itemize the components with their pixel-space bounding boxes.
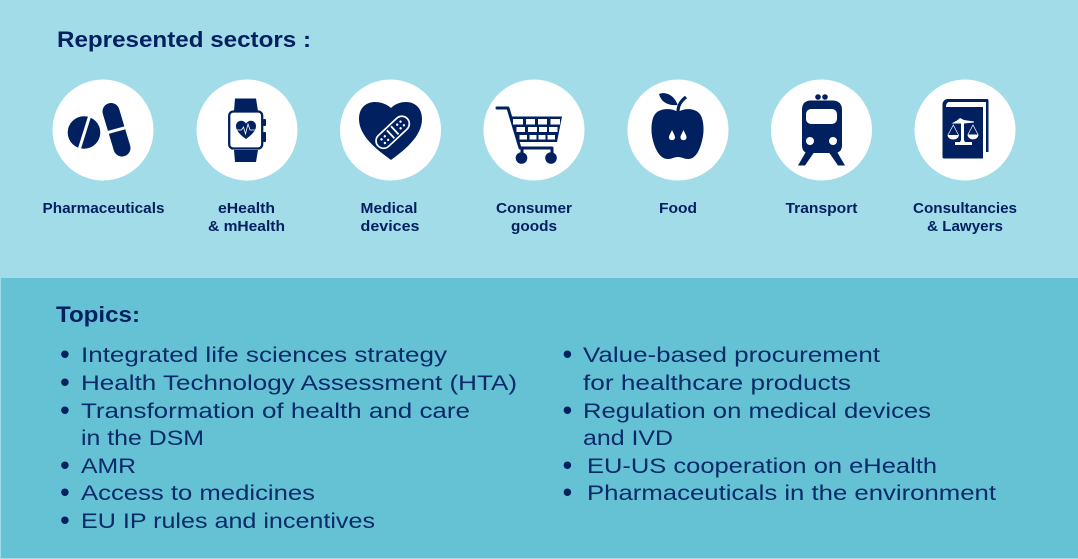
label: medical devices [360, 201, 420, 235]
sector: food [628, 80, 728, 217]
topics list: right column: • [562, 476, 572, 508]
label: consultancies and lawyers: & Lawyers [927, 219, 1003, 235]
icon: law book with scales [942, 99, 988, 158]
sector: consultancies and lawyers [913, 80, 1017, 235]
icon: heart with bandage [359, 102, 422, 160]
sector: pharmaceuticals [42, 80, 164, 217]
topics list: left column: • [60, 476, 70, 508]
panel: topics [1, 278, 1078, 558]
icon: train [798, 94, 845, 166]
label: eHealth and mHealth [208, 201, 285, 235]
topics list: left column: EU IP rules and incentives [81, 509, 375, 533]
topics list: left column: Transformation of health and care [81, 399, 470, 423]
sector: consumer goods [484, 80, 584, 235]
topics list: right column: • [562, 394, 572, 426]
sector: transport [771, 80, 872, 217]
topics list: left column: • [60, 504, 70, 536]
label: pharmaceuticals: Pharmaceuticals [42, 201, 164, 217]
heading: topics: Topics: [56, 302, 140, 327]
topics list: left column: in the DSM [81, 426, 204, 450]
label: food: Food [659, 201, 697, 217]
topics list: left column: • [60, 366, 70, 398]
topics list: right column: Pharmaceuticals in the environment [587, 481, 996, 505]
topics list: left column: Integrated life sciences strategy [81, 343, 447, 367]
topics list: right column: • [562, 338, 572, 370]
label: consumer goods: goods [511, 219, 557, 235]
topics list: right column: Regulation on medical devices [583, 399, 931, 423]
label: medical devices: devices [360, 219, 420, 235]
topics list: left column: Access to medicines [81, 481, 315, 505]
icon: pills [68, 112, 126, 150]
icon: apple [651, 93, 704, 159]
label: medical devices: Medical [360, 201, 418, 217]
topics list: right column: and IVD [583, 426, 673, 450]
icon: shopping cart [497, 108, 562, 164]
topics list: left column: • [60, 338, 70, 370]
label: eHealth and mHealth: eHealth [218, 201, 275, 217]
heading: represented sectors: Represented sectors : [57, 27, 311, 52]
topics list: right column: for healthcare products [583, 371, 851, 395]
topics list: left column: • [60, 450, 70, 480]
topics list: left column [60, 338, 517, 536]
label: consultancies and lawyers: Consultancies [913, 201, 1017, 217]
sector: eHealth and mHealth [196, 80, 298, 235]
topics list: left column: Health Technology Assessment (HTA) [81, 371, 517, 395]
topics list: right column: Value-based procurement [583, 343, 880, 367]
label: transport: Transport [786, 201, 858, 217]
label: consultancies and lawyers [913, 201, 1017, 235]
label: consumer goods: Consumer [496, 201, 572, 217]
topics list: right column: • [562, 450, 572, 480]
topics list: right column [562, 338, 996, 508]
label: eHealth and mHealth: & mHealth [208, 219, 285, 235]
topics list: right column: EU-US cooperation on eHealth [587, 454, 937, 478]
icon: smartwatch [229, 98, 266, 162]
label: consumer goods [496, 201, 572, 235]
sector: medical devices [340, 80, 441, 235]
topics list: left column: • [60, 394, 70, 426]
topics list: left column: AMR [81, 454, 136, 478]
